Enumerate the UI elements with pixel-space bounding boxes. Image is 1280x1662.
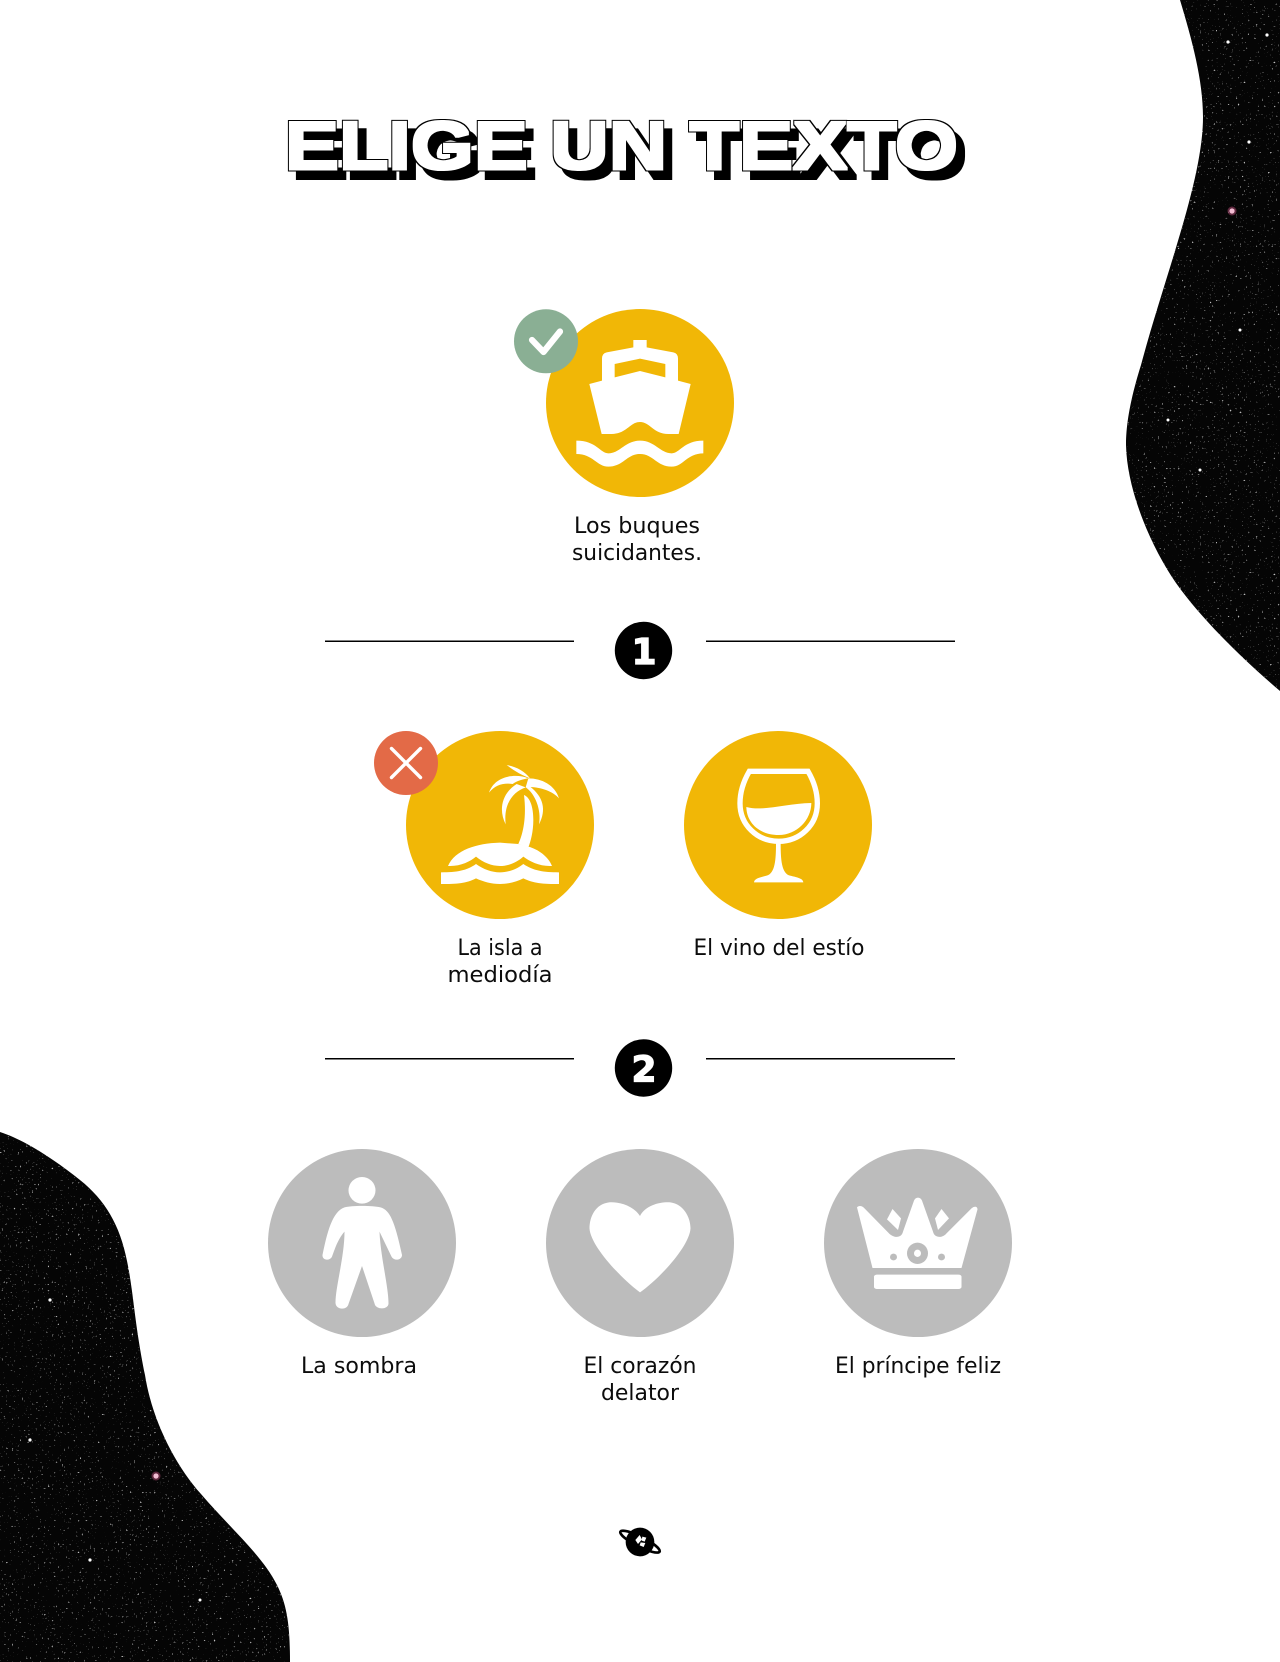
divider: step 2 [325, 1039, 955, 1097]
icon: island [406, 731, 594, 919]
icon: ship [546, 309, 734, 497]
label: Los buques suicidantes [572, 514, 702, 566]
panel: chosen text [514, 309, 734, 566]
starfield blob: top right [1126, 0, 1280, 691]
divider: step 2: 2 [631, 1050, 657, 1090]
label: La isla a mediodía: mediodía [448, 963, 552, 988]
label: La isla a mediodía [448, 936, 552, 988]
icon: check badge [514, 309, 578, 373]
icon: heart [546, 1149, 734, 1337]
icon: wine glass [684, 731, 872, 919]
icon: planet logo [618, 1527, 662, 1556]
label: La sombra: La sombra [301, 1354, 417, 1379]
divider: step 1 [325, 622, 955, 679]
label: El corazón delator [584, 1354, 696, 1406]
label: Los buques suicidantes: Los buques [574, 514, 700, 539]
title: ELIGE UN TEXTO [285, 108, 958, 184]
label: Los buques suicidantes: suicidantes. [572, 541, 702, 566]
panel: step 2 options [268, 1149, 1012, 1406]
label: La isla a mediodía: La isla a [458, 936, 542, 961]
icon: cross badge [374, 731, 438, 795]
icon: crown [824, 1149, 1012, 1337]
label: El vino del estío: El vino del estío [694, 936, 864, 961]
starfield blob: bottom left [0, 1120, 300, 1662]
icon: person [268, 1149, 456, 1337]
divider: step 1: 1 [631, 632, 657, 673]
label: El corazón delator: delator [601, 1381, 680, 1406]
label: El corazón delator: El corazón [584, 1354, 696, 1379]
panel: step 1 options [374, 731, 872, 988]
label: El príncipe feliz: El príncipe feliz [835, 1354, 1001, 1379]
